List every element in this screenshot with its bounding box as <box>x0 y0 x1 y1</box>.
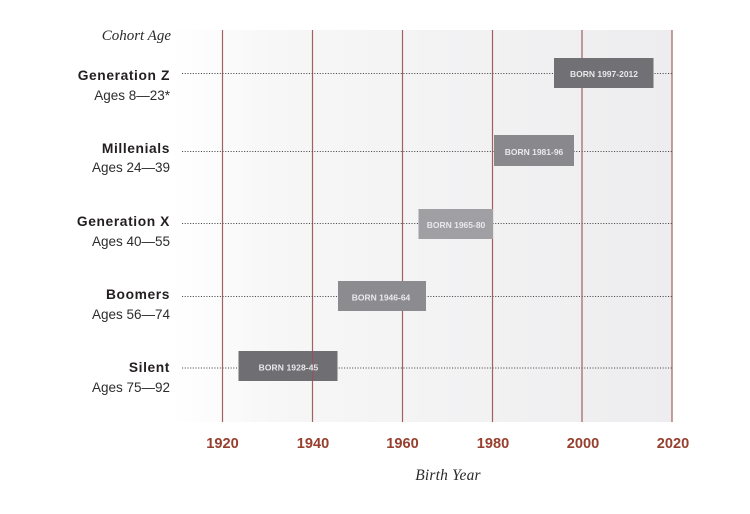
label: boomers: Ages 56—74 <box>92 307 170 322</box>
heading: birth year: Birth Year <box>415 467 482 484</box>
bar: boomers <box>338 281 426 311</box>
label: generation x <box>77 214 170 249</box>
bar: millenials: BORN 1981-96 <box>505 147 564 157</box>
axis years: 1960 <box>386 436 419 452</box>
label: boomers: Boomers <box>106 287 170 302</box>
bar: generation z: BORN 1997-2012 <box>570 69 638 79</box>
axis years: 2020 <box>657 436 689 452</box>
plot background <box>172 30 672 422</box>
label: generation x: Ages 40—55 <box>92 234 170 249</box>
label: millenials: Millenials <box>102 141 170 156</box>
heading: cohort age: Cohort Age <box>102 28 171 44</box>
label: millenials: Ages 24—39 <box>92 160 170 175</box>
bar: boomers: BORN 1946-64 <box>352 292 411 302</box>
bar: generation x: BORN 1965-80 <box>427 220 486 230</box>
label: generation z <box>78 68 171 103</box>
axis years: 1940 <box>297 436 329 452</box>
label: silent: Ages 75—92 <box>92 380 170 395</box>
bar: generation x <box>418 209 493 239</box>
axis years <box>206 436 689 452</box>
bar: millenials <box>494 135 574 166</box>
bar: silent <box>238 351 338 381</box>
label: generation z: Ages 8—23* <box>94 88 171 103</box>
bar: silent: BORN 1928-45 <box>259 362 319 372</box>
label: generation x: Generation X <box>77 214 170 229</box>
label: boomers <box>92 287 170 322</box>
gridlines by decade <box>222 30 672 422</box>
label: generation z: Generation Z <box>78 68 170 83</box>
label: silent <box>92 360 170 395</box>
axis years: 1980 <box>477 436 509 452</box>
bar: generation z <box>554 58 654 88</box>
cohort guide lines <box>182 74 672 368</box>
label: silent: Silent <box>129 360 170 375</box>
axis years: 1920 <box>206 436 239 452</box>
axis years: 2000 <box>567 436 599 452</box>
label: millenials <box>92 141 170 175</box>
